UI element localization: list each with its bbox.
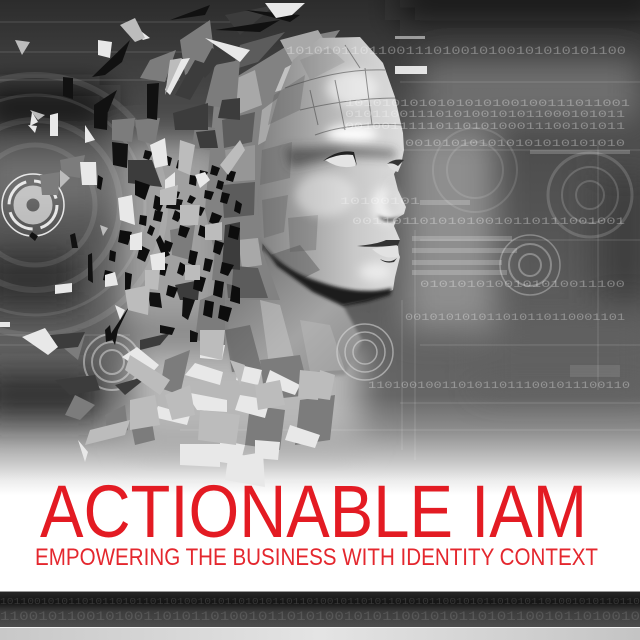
binary text overlays: 1010101010101010100100111011001 <box>345 99 630 110</box>
binary text overlays: 10101010010110111001001 <box>410 217 625 228</box>
face panels <box>260 48 345 280</box>
binary text overlays: 0101100111010100101011000101011 <box>345 110 625 121</box>
nose shadow <box>377 215 405 222</box>
highlights <box>295 70 398 281</box>
left faint rings <box>0 75 165 335</box>
concentric circle graphics <box>0 75 632 390</box>
shattering fragments: black <box>29 5 300 345</box>
neck panels <box>225 300 345 380</box>
head <box>205 30 406 380</box>
binary text overlays: 0010011111011010100011100101011 <box>345 122 625 133</box>
circuit block grid <box>395 36 630 377</box>
shattering fragments: light grey <box>15 18 335 445</box>
left bright target <box>2 174 64 236</box>
binary text overlays: 001010101010101010101010 <box>405 139 625 150</box>
shattering fragments: white <box>0 3 320 487</box>
lower-left ring <box>84 334 140 390</box>
bottom binary band: 1011001010110101101011011010010101101010110110100101101011010101100101011010101101001010110110 <box>0 597 640 607</box>
hair panels <box>205 30 340 300</box>
forehead panel lines <box>285 45 403 135</box>
bottom light strip <box>0 627 640 640</box>
shattering fragments: dark grey <box>48 5 275 395</box>
binary text overlays: 11010010011010110111001011100110 <box>368 381 630 392</box>
binary text overlays: 001010101011010110110001101 <box>405 313 625 324</box>
binary text overlays <box>286 46 630 392</box>
brow shadow <box>285 146 396 220</box>
face shape <box>257 37 406 305</box>
jaw shadow crescent <box>258 238 392 306</box>
bottom binary band: 1100101100101001101011010010110101001010110010101101011001011010010 <box>0 609 640 624</box>
neck ring <box>337 324 393 380</box>
right rings <box>500 235 560 295</box>
dense black particle cluster <box>97 150 242 322</box>
eyes <box>323 151 404 172</box>
binary text overlays: 001101 <box>352 217 412 228</box>
neck <box>225 250 362 378</box>
binary text overlays: 0101010100101010011100 <box>420 280 625 291</box>
shattering fragments: mid grey <box>40 20 335 450</box>
binary text overlays: 10100101 <box>340 197 420 208</box>
lips <box>357 240 400 263</box>
bottom binary band <box>0 591 640 627</box>
binary text overlays: 1010101101100111010010100101010101100 <box>286 46 626 58</box>
